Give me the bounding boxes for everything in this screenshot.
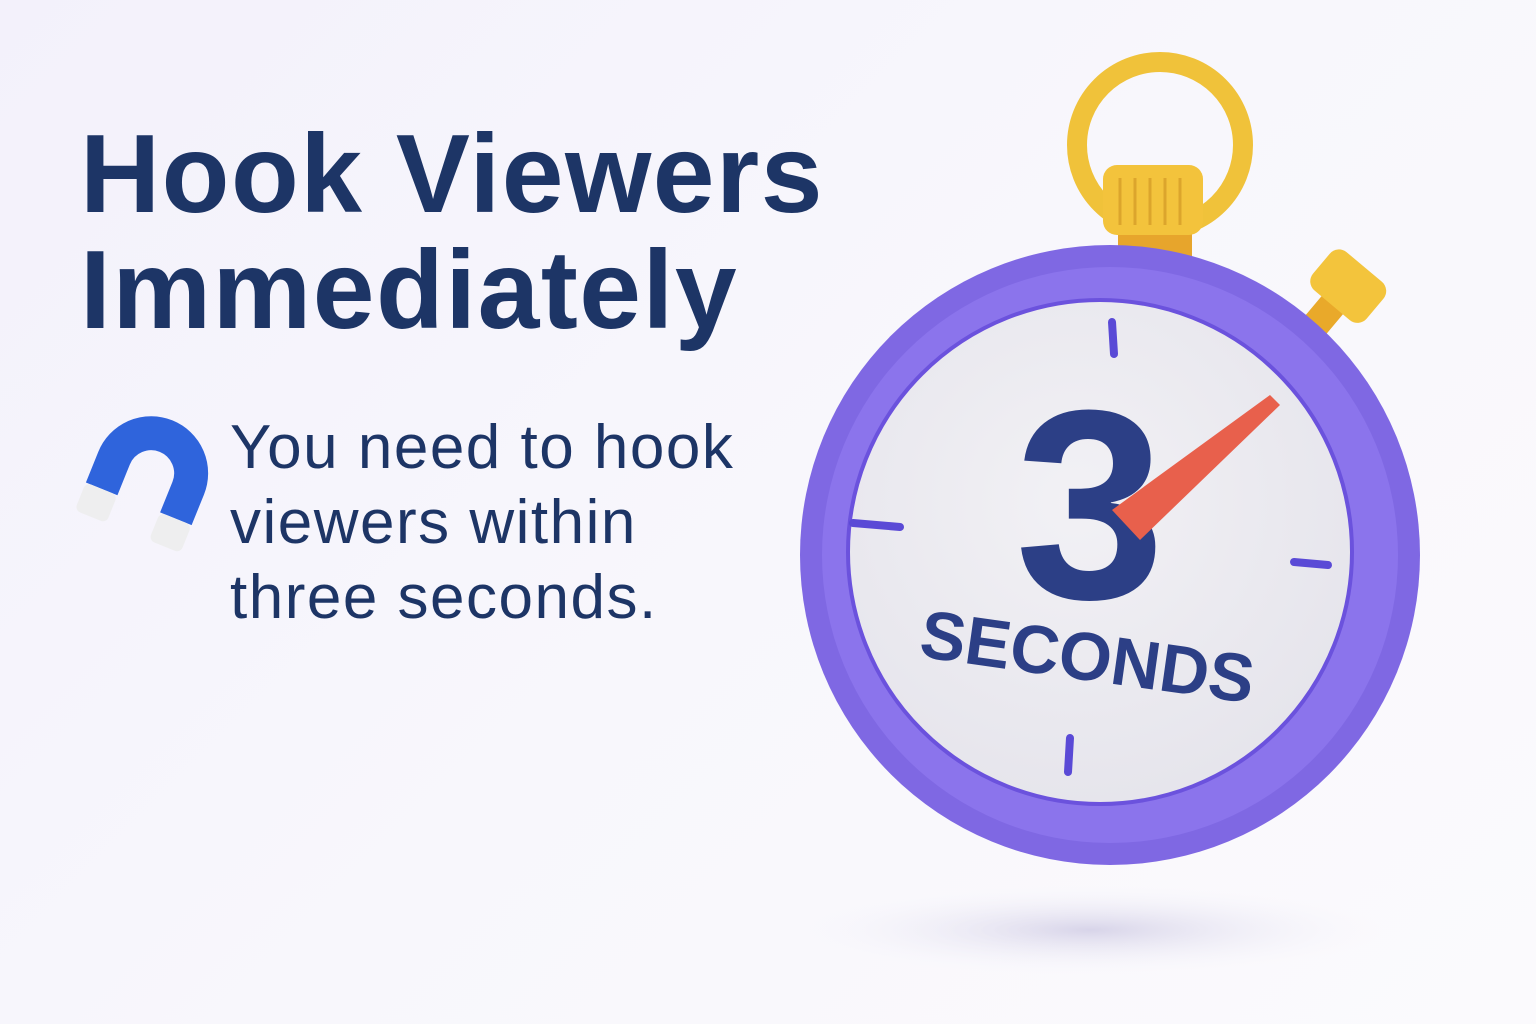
clock face	[848, 300, 1352, 804]
ring	[1077, 62, 1243, 228]
side button	[1283, 245, 1391, 355]
title: Immediately	[80, 228, 738, 352]
body text: viewers within	[230, 488, 637, 557]
SECONDS label: SECONDS	[916, 596, 1259, 718]
body text: three seconds.	[230, 563, 658, 632]
body text	[230, 413, 734, 632]
number 3: 3	[1015, 355, 1165, 656]
icon: magnet	[76, 416, 208, 551]
crown	[1103, 165, 1203, 265]
body text: You need to hook	[230, 413, 734, 482]
title	[80, 112, 824, 352]
hand	[1112, 395, 1280, 540]
title: Hook Viewers	[80, 112, 824, 236]
